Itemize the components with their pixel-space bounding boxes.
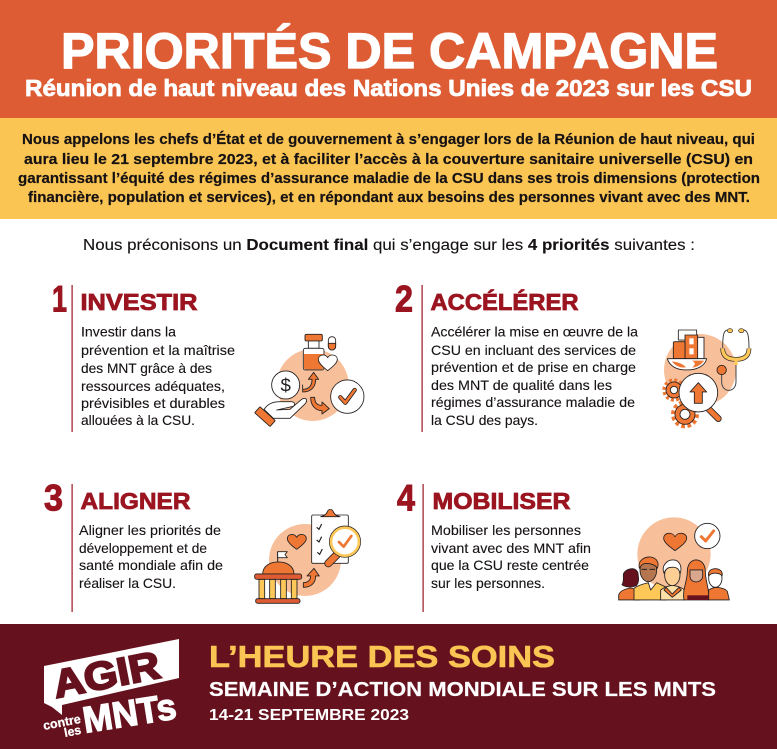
logo: agir contre les MNTs: les (63, 723, 82, 740)
call to action band: garantissant l’équité des régimes d’assurance maladie de la CSU dans ses trois dimensions (protection (18, 171, 760, 187)
footer (0, 624, 777, 749)
call to action band: financière, population et services), et en répondant aux besoins des personnes vivant avec des MNT. (28, 190, 750, 206)
text mobiliser (431, 522, 591, 591)
text mobiliser: que la CSU reste centrée (431, 557, 589, 573)
priority 3: aligner (44, 478, 359, 612)
call to action band: Nous appelons les chefs d’État et de gouvernement à s’engager lors de la Réunion de haut niveau, qui (22, 131, 755, 148)
call to action band: aura lieu le 21 septembre 2023, et à faciliter l’accès à la couverture sanitaire universelle (CSU) en (24, 152, 753, 168)
logo: agir contre les MNTs: AGIR (50, 644, 164, 707)
heading accélérer: ACCÉLÉRER (430, 288, 579, 315)
campaign week: SEMAINE D’ACTION MONDIALE SUR LES MNTS (209, 679, 716, 701)
text accélérer: des MNT de qualité dans les (431, 377, 612, 393)
text aligner: réaliser la CSU. (79, 575, 176, 591)
heading aligner: ALIGNER (80, 488, 191, 514)
number 1: 1 (52, 278, 67, 320)
priority 1: investir (52, 278, 364, 432)
subtitle: Réunion de haut niveau des Nations Unies de 2023 sur les CSU (25, 75, 752, 101)
logo: agir contre les MNTs: MNTs (80, 686, 179, 741)
priority 4: mobiliser (397, 478, 729, 612)
text aligner (79, 522, 223, 591)
heading mobiliser: MOBILISER (432, 488, 571, 514)
text aligner: santé mondiale afin de (79, 557, 223, 573)
icon: stethoscope and upward magnifier (664, 329, 749, 426)
priority 2: accélérer (395, 278, 749, 432)
text investir: prévisibles et durables (81, 395, 225, 411)
number 2: 2 (395, 278, 413, 320)
icon: money to medicine (255, 334, 364, 427)
text accélérer: régimes d’assurance maladie de (431, 394, 635, 410)
logo: agir contre les MNTs (42, 639, 179, 741)
text investir: ressources adéquates, (81, 378, 225, 394)
text investir: Investir dans la (81, 324, 176, 340)
campaign name: L’HEURE DES SOINS (209, 639, 555, 674)
icon: government building and checklist (255, 509, 359, 603)
text investir: prévention et la maîtrise (81, 342, 235, 358)
text mobiliser: vivant avec des MNT afin (431, 540, 591, 556)
heading investir: INVESTIR (80, 289, 198, 315)
text accélérer: Accélérer la mise en œuvre de la (431, 324, 638, 340)
number 4: 4 (397, 478, 415, 518)
text investir: allouées à la CSU. (81, 412, 195, 428)
text mobiliser: sur les personnes. (431, 575, 545, 591)
text investir (81, 324, 235, 428)
icon: money to medicine: $ (280, 375, 291, 396)
header banner (0, 0, 777, 118)
text aligner: développement et de (79, 540, 207, 556)
text accélérer: prévention et de prise en charge (431, 359, 636, 375)
text accélérer: la CSU des pays. (431, 412, 538, 428)
text aligner: Aligner les priorités de (79, 522, 221, 538)
text accélérer (431, 324, 638, 428)
text accélérer: CSU en incluant des services de (431, 342, 636, 358)
icon: group of people (619, 517, 729, 600)
text investir: des MNT grâce à des (81, 360, 212, 376)
text mobiliser: Mobiliser les personnes (431, 522, 581, 538)
logo: agir contre les MNTs: contre (42, 712, 82, 733)
intro sentence: Nous préconisons un Document final qui s’engage sur les 4 priorités suivantes : (83, 237, 695, 254)
number 3: 3 (44, 478, 63, 518)
dates: 14-21 SEPTEMBRE 2023 (209, 707, 409, 724)
title: PRIORITÉS DE CAMPAGNE (61, 23, 718, 79)
call to action band (0, 118, 777, 219)
